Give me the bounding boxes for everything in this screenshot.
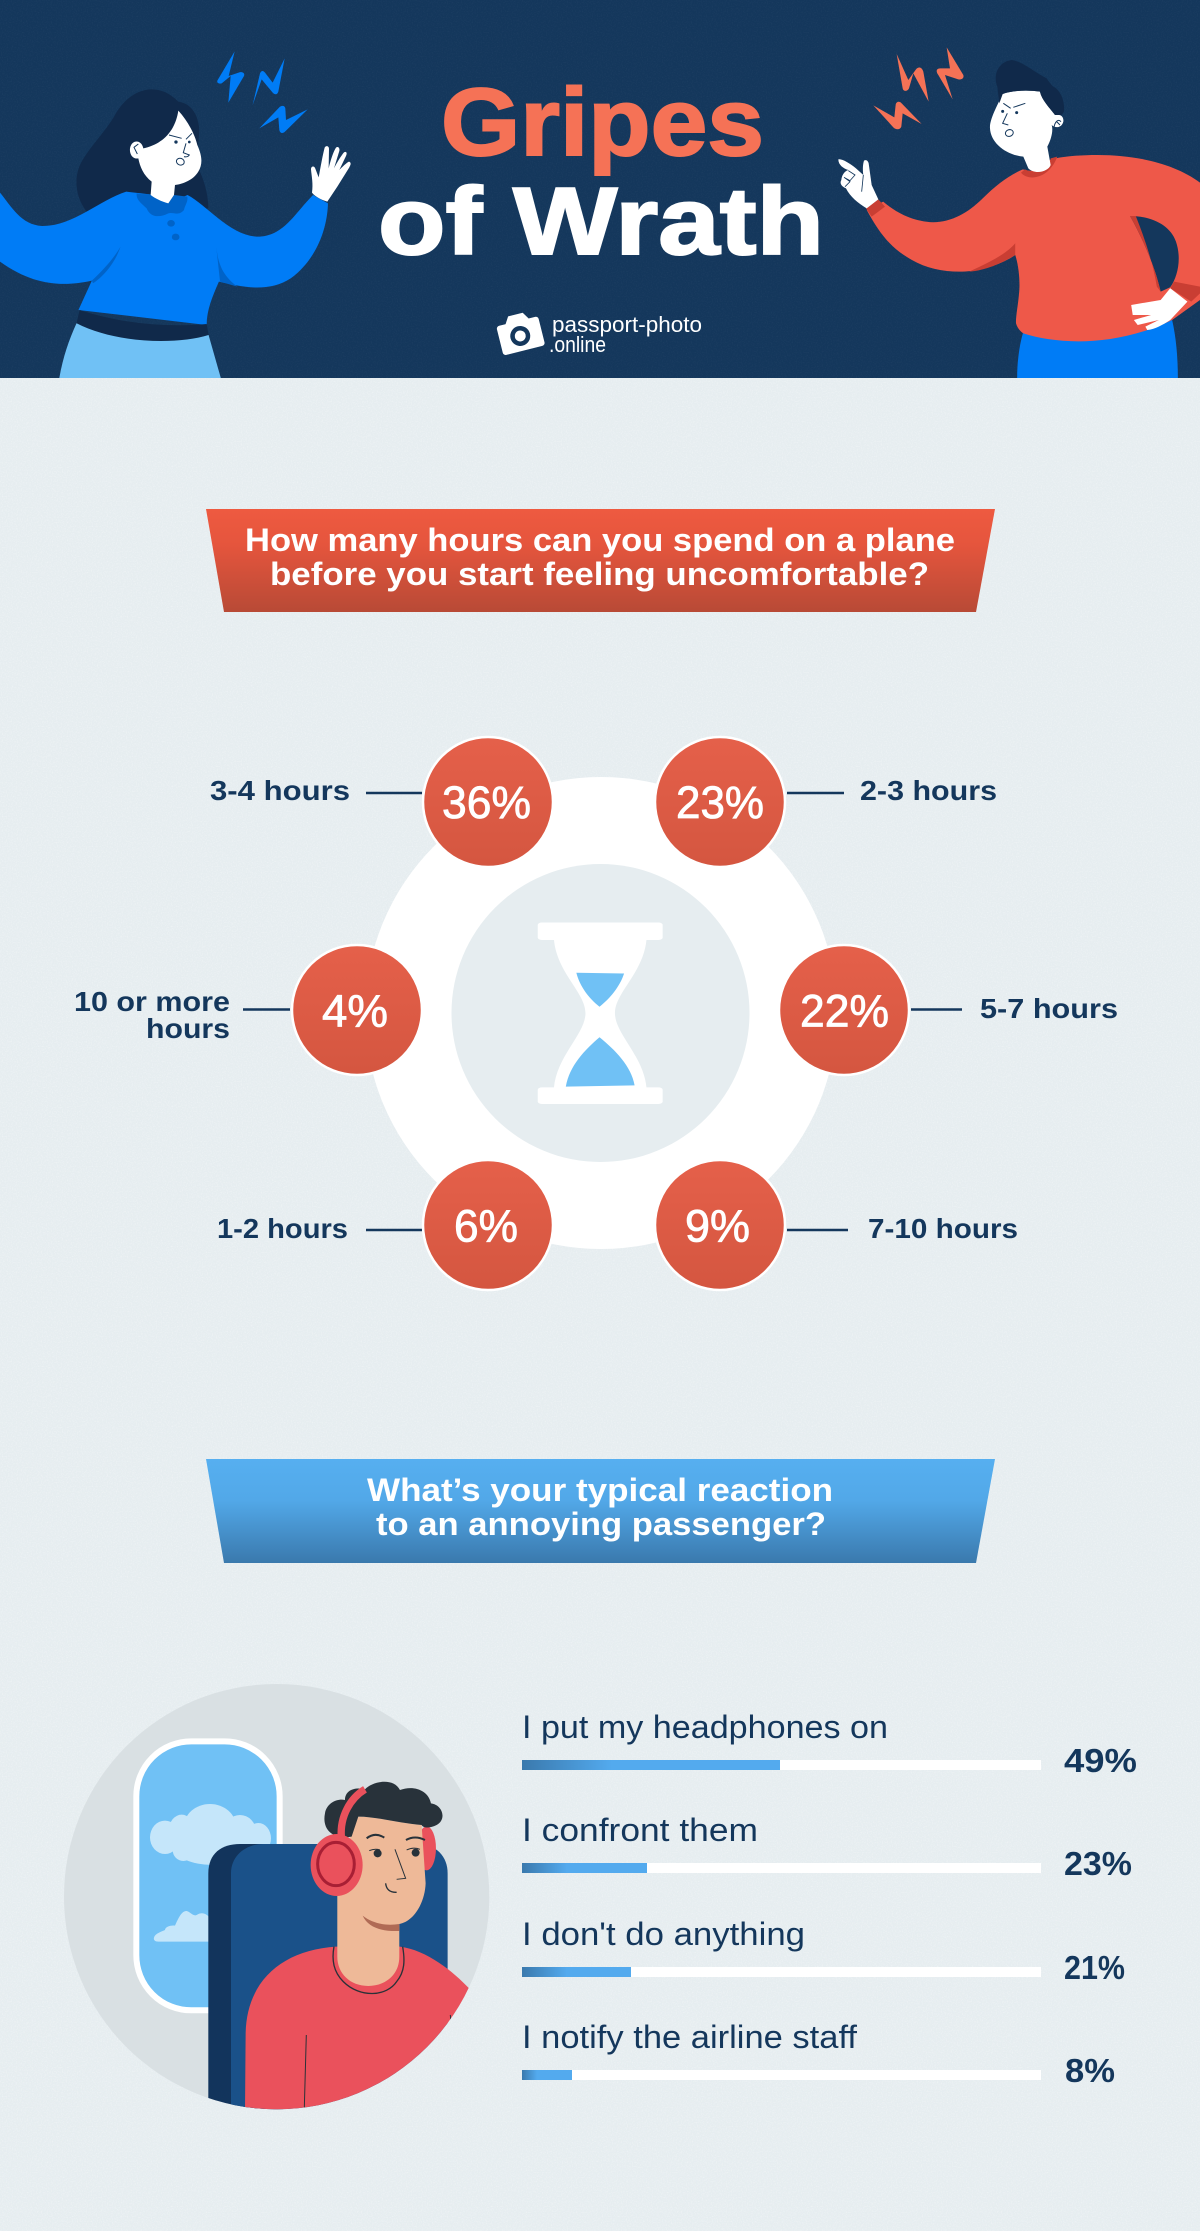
stat: 4% 10 or more hours — [74, 945, 422, 1075]
section heading: plane hours: before you start feeling uncomfortable? — [270, 556, 929, 592]
icon: plane window — [136, 1741, 280, 2010]
stat: 23% 2-3 hours: 2-3 hours — [860, 775, 997, 806]
stat: 9% 7-10 hours — [655, 1160, 1018, 1290]
title: of Wrath — [378, 168, 824, 275]
stat: 4% 10 or more hours: hours — [146, 1013, 230, 1044]
section heading: annoying passenger: What’s your typical reaction — [367, 1472, 833, 1508]
stat: 22% 5-7 hours — [779, 945, 1118, 1075]
stat: 9% 7-10 hours: 7-10 hours — [868, 1213, 1018, 1244]
logo: passport-photo.online: .online — [549, 332, 606, 357]
row: I don't do anything 21% — [522, 1916, 1125, 1986]
row: I put my headphones on 49%: I put my headphones on — [522, 1709, 888, 1745]
row: I don't do anything 21%: I don't do anything — [522, 1916, 805, 1952]
icon: blue lightning bolts — [217, 51, 308, 133]
stat: 23% 2-3 hours — [655, 737, 997, 867]
stat: 23% 2-3 hours: 23% — [676, 777, 764, 828]
title — [378, 69, 824, 275]
row: I confront them 23% — [522, 1812, 1132, 1882]
icon: raised hand — [311, 146, 351, 202]
row: I confront them 23%: 23% — [1064, 1845, 1132, 1882]
row: I notify the airline staff 8%: 8% — [1065, 2052, 1115, 2089]
stat: 22% 5-7 hours: 5-7 hours — [980, 993, 1118, 1024]
illustration: angry man — [838, 47, 1200, 378]
header banner — [0, 0, 1200, 378]
section heading: annoying passenger — [206, 1459, 995, 1563]
row: I put my headphones on 49% — [522, 1709, 1137, 1779]
stat: 6% 1-2 hours: 1-2 hours — [217, 1213, 348, 1244]
stat: 9% 7-10 hours: 9% — [685, 1200, 750, 1252]
stat: 4% 10 or more hours: 10 or more — [74, 986, 230, 1017]
stat: 6% 1-2 hours — [217, 1160, 553, 1290]
icon: orange lightning bolts — [873, 47, 964, 129]
logo: passport-photo.online — [495, 309, 702, 357]
connector lines — [243, 793, 962, 1230]
stat: 36% 3-4 hours: 3-4 hours — [210, 775, 350, 806]
bar chart: typical reactions — [522, 1709, 1137, 2089]
row: I put my headphones on 49%: 49% — [1064, 1742, 1137, 1779]
row: I notify the airline staff 8% — [522, 2019, 1115, 2089]
stat: 6% 1-2 hours: 6% — [454, 1200, 518, 1252]
stat: 36% 3-4 hours — [210, 737, 553, 867]
icon: pointing hand — [838, 159, 885, 217]
chart: hours on a plane radial — [74, 737, 1118, 1290]
title: Gripes — [441, 69, 764, 176]
passenger figure — [245, 1782, 468, 2110]
section heading: annoying passenger: to an annoying passenger? — [376, 1506, 826, 1542]
logo: passport-photo.online: passport-photo — [552, 312, 702, 337]
icon: headphone ear cup — [311, 1834, 363, 1896]
stat: 22% 5-7 hours: 22% — [800, 986, 889, 1036]
row: I notify the airline staff 8%: I notify the airline staff — [522, 2019, 857, 2055]
row: I confront them 23%: I confront them — [522, 1812, 758, 1848]
illustration: angry woman — [0, 51, 351, 378]
section heading: plane hours: How many hours can you spend on a plane — [245, 522, 955, 558]
icon: hourglass — [538, 923, 663, 1104]
row: I don't do anything 21%: 21% — [1064, 1949, 1125, 1986]
airplane seat — [208, 1844, 448, 2137]
illustration: passenger with headphones — [64, 1684, 493, 2137]
stat: 36% 3-4 hours: 36% — [442, 777, 531, 828]
section heading: plane hours — [206, 509, 995, 612]
stat: 4% 10 or more hours: 4% — [322, 986, 388, 1036]
